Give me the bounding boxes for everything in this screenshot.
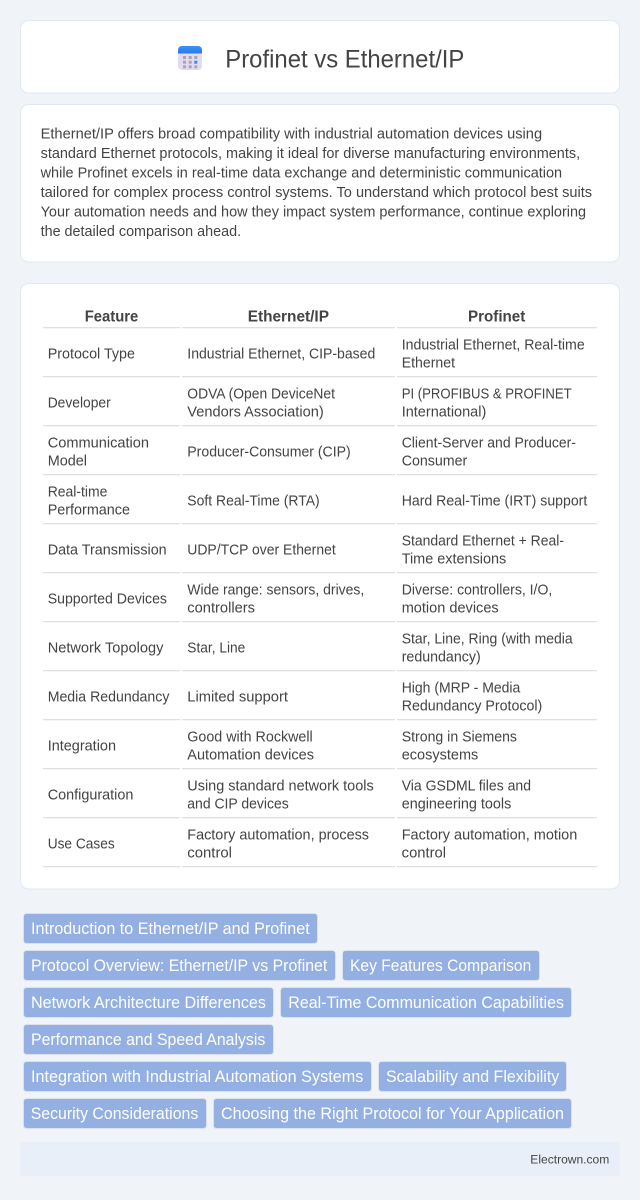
tag: key features — [342, 950, 540, 980]
row: communication model — [43, 435, 597, 475]
table header row — [43, 309, 597, 328]
row: media redundancy: Limited support — [187, 689, 288, 705]
row: network topology: Star, Line — [187, 640, 245, 656]
row: protocol type: Ethernet — [402, 355, 455, 371]
row: configuration: Via GSDML files and — [402, 778, 531, 794]
tag: integration: Integration with Industrial Automation Systems — [31, 1067, 363, 1086]
row: data transmission: Data Transmission — [48, 542, 167, 558]
row: communication model: Producer-Consumer (CIP) — [187, 444, 351, 460]
row: supported devices: Supported Devices — [48, 591, 167, 607]
panel: title header — [20, 20, 620, 93]
row: protocol type: Protocol Type — [48, 346, 135, 362]
row: supported devices — [43, 582, 597, 622]
tag: performance: Performance and Speed Analysis — [31, 1030, 265, 1049]
text block: intro paragraph: the detailed comparison ahead. — [41, 224, 241, 240]
row: configuration: Using standard network tools — [187, 778, 374, 794]
tag: key features: Key Features Comparison — [350, 956, 531, 975]
text block: intro paragraph: standard Ethernet protocols, making it ideal for diverse manufacturing environments, — [41, 146, 580, 162]
footer: Electrown.com — [530, 1152, 609, 1166]
tag: network architecture: Network Architecture Differences — [31, 993, 266, 1012]
row: developer: PI (PROFIBUS & PROFINET — [402, 386, 572, 402]
row: media redundancy: Media Redundancy — [48, 689, 170, 705]
row: integration: Good with Rockwell — [187, 729, 313, 745]
title: Profinet vs Ethernet/IP — [225, 45, 464, 73]
row: integration: Integration — [48, 738, 116, 754]
row: real-time performance: Performance — [48, 502, 130, 518]
text block: intro paragraph: while Profinet excels in real-time data exchange and deterministic communication — [40, 166, 562, 182]
row: protocol type: Industrial Ethernet, CIP-based — [187, 346, 375, 362]
row: real-time performance: Hard Real-Time (IRT) support — [402, 493, 587, 509]
panel: comparison table — [20, 284, 620, 889]
row: use cases: Use Cases — [48, 836, 115, 852]
icon: calendar — [178, 46, 202, 70]
row: media redundancy: Redundancy Protocol) — [402, 698, 542, 714]
tag: choosing the right protocol — [214, 1098, 572, 1128]
panel: topic tags — [24, 914, 572, 1128]
row: use cases: Factory automation, process — [187, 827, 369, 843]
table header row: Profinet — [468, 309, 526, 326]
row: real-time performance — [43, 484, 597, 524]
row: protocol type: Industrial Ethernet, Real-time — [402, 337, 585, 353]
tag: security — [24, 1098, 206, 1128]
row: use cases: control — [187, 845, 232, 861]
tag: protocol overview — [24, 950, 336, 980]
tag: security: Security Considerations — [31, 1104, 198, 1123]
tag: introduction — [24, 914, 318, 944]
row: communication model: Client-Server and Producer- — [402, 435, 576, 451]
row: supported devices: Diverse: controllers, I/O, — [402, 582, 552, 598]
row: network topology: Star, Line, Ring (with media — [402, 631, 574, 647]
text block: intro paragraph — [40, 126, 592, 240]
tag: scalability — [378, 1062, 566, 1092]
row: data transmission: Standard Ethernet + Real- — [402, 533, 564, 549]
tag: protocol overview: Protocol Overview: Ethernet/IP vs Profinet — [31, 956, 328, 975]
row: protocol type — [43, 337, 597, 377]
text block: intro paragraph: tailored for complex process control systems. To understand which protocol best suits — [41, 185, 592, 201]
table header row: Ethernet/IP — [248, 309, 329, 326]
row: integration: Strong in Siemens — [402, 729, 517, 745]
row: configuration: Configuration — [48, 787, 133, 803]
row: developer: Vendors Association) — [187, 404, 324, 420]
row: integration — [43, 729, 597, 769]
row: communication model: Communication — [48, 435, 149, 451]
row: real-time performance: Real-time — [48, 484, 107, 500]
tag: network architecture — [24, 988, 274, 1018]
tag: real-time communication: Real-Time Communication Capabilities — [288, 993, 564, 1012]
row: communication model: Model — [48, 453, 87, 469]
row: developer: Developer — [48, 395, 111, 411]
row: supported devices: Wide range: sensors, drives, — [187, 582, 364, 598]
row: configuration: and CIP devices — [187, 796, 289, 812]
row: integration: ecosystems — [402, 747, 478, 763]
row: supported devices: motion devices — [402, 600, 499, 616]
row: data transmission — [43, 533, 597, 573]
panel: introduction — [20, 104, 620, 262]
tag: real-time communication — [280, 988, 572, 1018]
row: supported devices: controllers — [187, 600, 255, 616]
row: configuration: engineering tools — [402, 796, 511, 812]
text block: intro paragraph: Your automation needs and how they impact system performance, continue exploring — [41, 204, 586, 220]
row: configuration — [43, 778, 597, 818]
row: integration: Automation devices — [187, 747, 314, 763]
row: use cases: control — [402, 845, 446, 861]
tag: choosing the right protocol: Choosing the Right Protocol for Your Application — [221, 1104, 564, 1123]
row: media redundancy — [43, 680, 597, 720]
tag: performance — [24, 1024, 274, 1054]
row: use cases — [43, 827, 597, 867]
row: developer: ODVA (Open DeviceNet — [187, 386, 335, 402]
row: developer — [43, 386, 597, 426]
row: developer: International) — [402, 404, 486, 420]
row: data transmission: Time extensions — [402, 551, 506, 567]
tag: integration — [24, 1062, 372, 1092]
text block: intro paragraph: Ethernet/IP offers broad compatibility with industrial automation devices using — [41, 126, 542, 142]
row: network topology: redundancy) — [402, 649, 481, 665]
row: communication model: Consumer — [402, 453, 467, 469]
row: data transmission: UDP/TCP over Ethernet — [187, 542, 336, 558]
row: network topology: Network Topology — [48, 640, 164, 656]
tag: introduction: Introduction to Ethernet/IP and Profinet — [31, 919, 310, 938]
footer — [20, 1142, 620, 1176]
row: media redundancy: High (MRP - Media — [402, 680, 521, 696]
tag: scalability: Scalability and Flexibility — [386, 1067, 560, 1086]
row: network topology — [43, 631, 597, 671]
row: use cases: Factory automation, motion — [402, 827, 577, 843]
table header row: Feature — [85, 309, 138, 326]
row: real-time performance: Soft Real-Time (RTA) — [187, 493, 320, 509]
